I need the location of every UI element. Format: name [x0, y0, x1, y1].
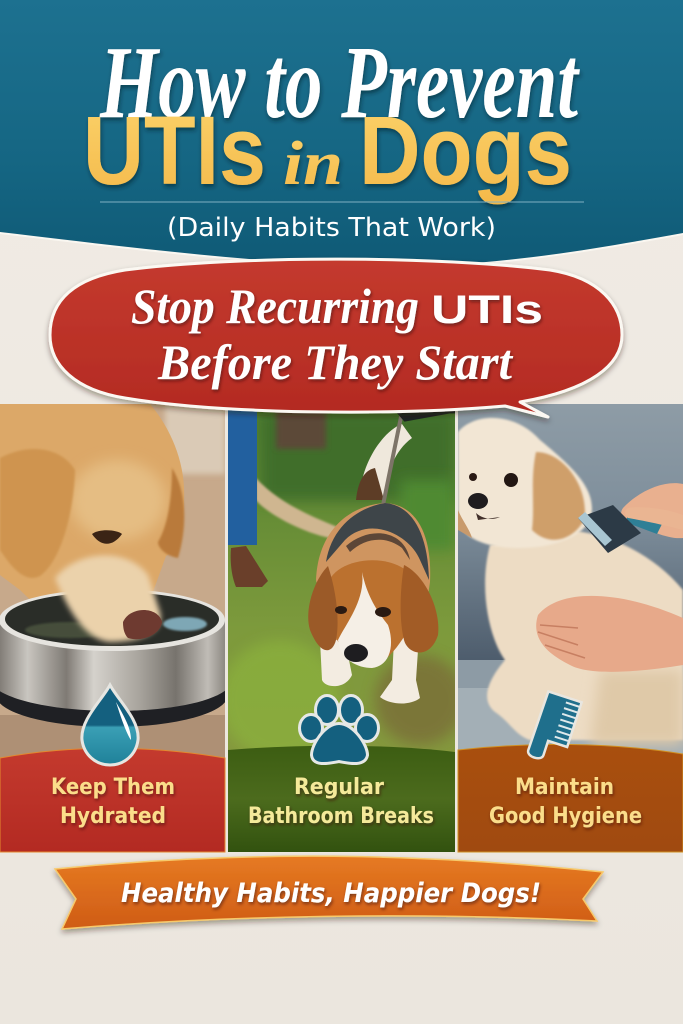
- label: Good Hygiene: [489, 804, 642, 829]
- leash: [382, 412, 402, 510]
- label: Maintain: [515, 775, 614, 800]
- bottom ribbon banner: [55, 856, 603, 929]
- person's leg: [228, 404, 257, 545]
- photo: beagle on leash: [228, 410, 455, 752]
- band: [228, 746, 455, 852]
- speech bubble callout: Stop Recurring: [131, 278, 419, 334]
- title: in: [283, 130, 343, 198]
- band: [0, 748, 225, 852]
- header banner: [0, 0, 683, 268]
- panel: regular bathroom breaks: [220, 404, 465, 852]
- label: Bathroom Breaks: [248, 804, 434, 829]
- title: [83, 25, 580, 205]
- thumb: [627, 512, 662, 525]
- panel: keep them hydrated: [0, 404, 228, 852]
- label: Regular: [294, 775, 384, 800]
- label: [248, 775, 434, 829]
- photo: golden retriever drinking: [0, 404, 225, 758]
- upper hand: [621, 483, 683, 538]
- legs: [380, 638, 420, 704]
- dog tail: [360, 424, 412, 500]
- label: [489, 775, 642, 829]
- photo: fluffy dog being brushed: [458, 404, 683, 760]
- body: [316, 503, 430, 650]
- bowl: [0, 690, 225, 726]
- band: [458, 744, 683, 852]
- label: Hydrated: [60, 804, 166, 829]
- muzzle: [55, 555, 161, 642]
- icon: comb: [527, 691, 582, 766]
- brush: [626, 517, 662, 534]
- icon: water drop: [82, 685, 138, 765]
- lower hand: [536, 596, 683, 672]
- speech bubble callout: [50, 259, 622, 417]
- title: UTIs: [83, 96, 266, 205]
- panel: maintain good hygiene: [458, 404, 683, 852]
- icon: paw print: [301, 697, 377, 762]
- speech bubble callout: UTIs: [431, 288, 543, 332]
- label: [51, 775, 175, 829]
- subtitle: (Daily Habits That Work): [167, 213, 496, 243]
- dog head: [458, 418, 592, 548]
- title: Dogs: [359, 96, 572, 205]
- dog body: [485, 530, 683, 740]
- label: Keep Them: [51, 775, 175, 800]
- speech bubble callout: Before They Start: [157, 334, 514, 390]
- bottom ribbon banner: Healthy Habits, Happier Dogs!: [121, 878, 541, 909]
- head: [331, 560, 404, 658]
